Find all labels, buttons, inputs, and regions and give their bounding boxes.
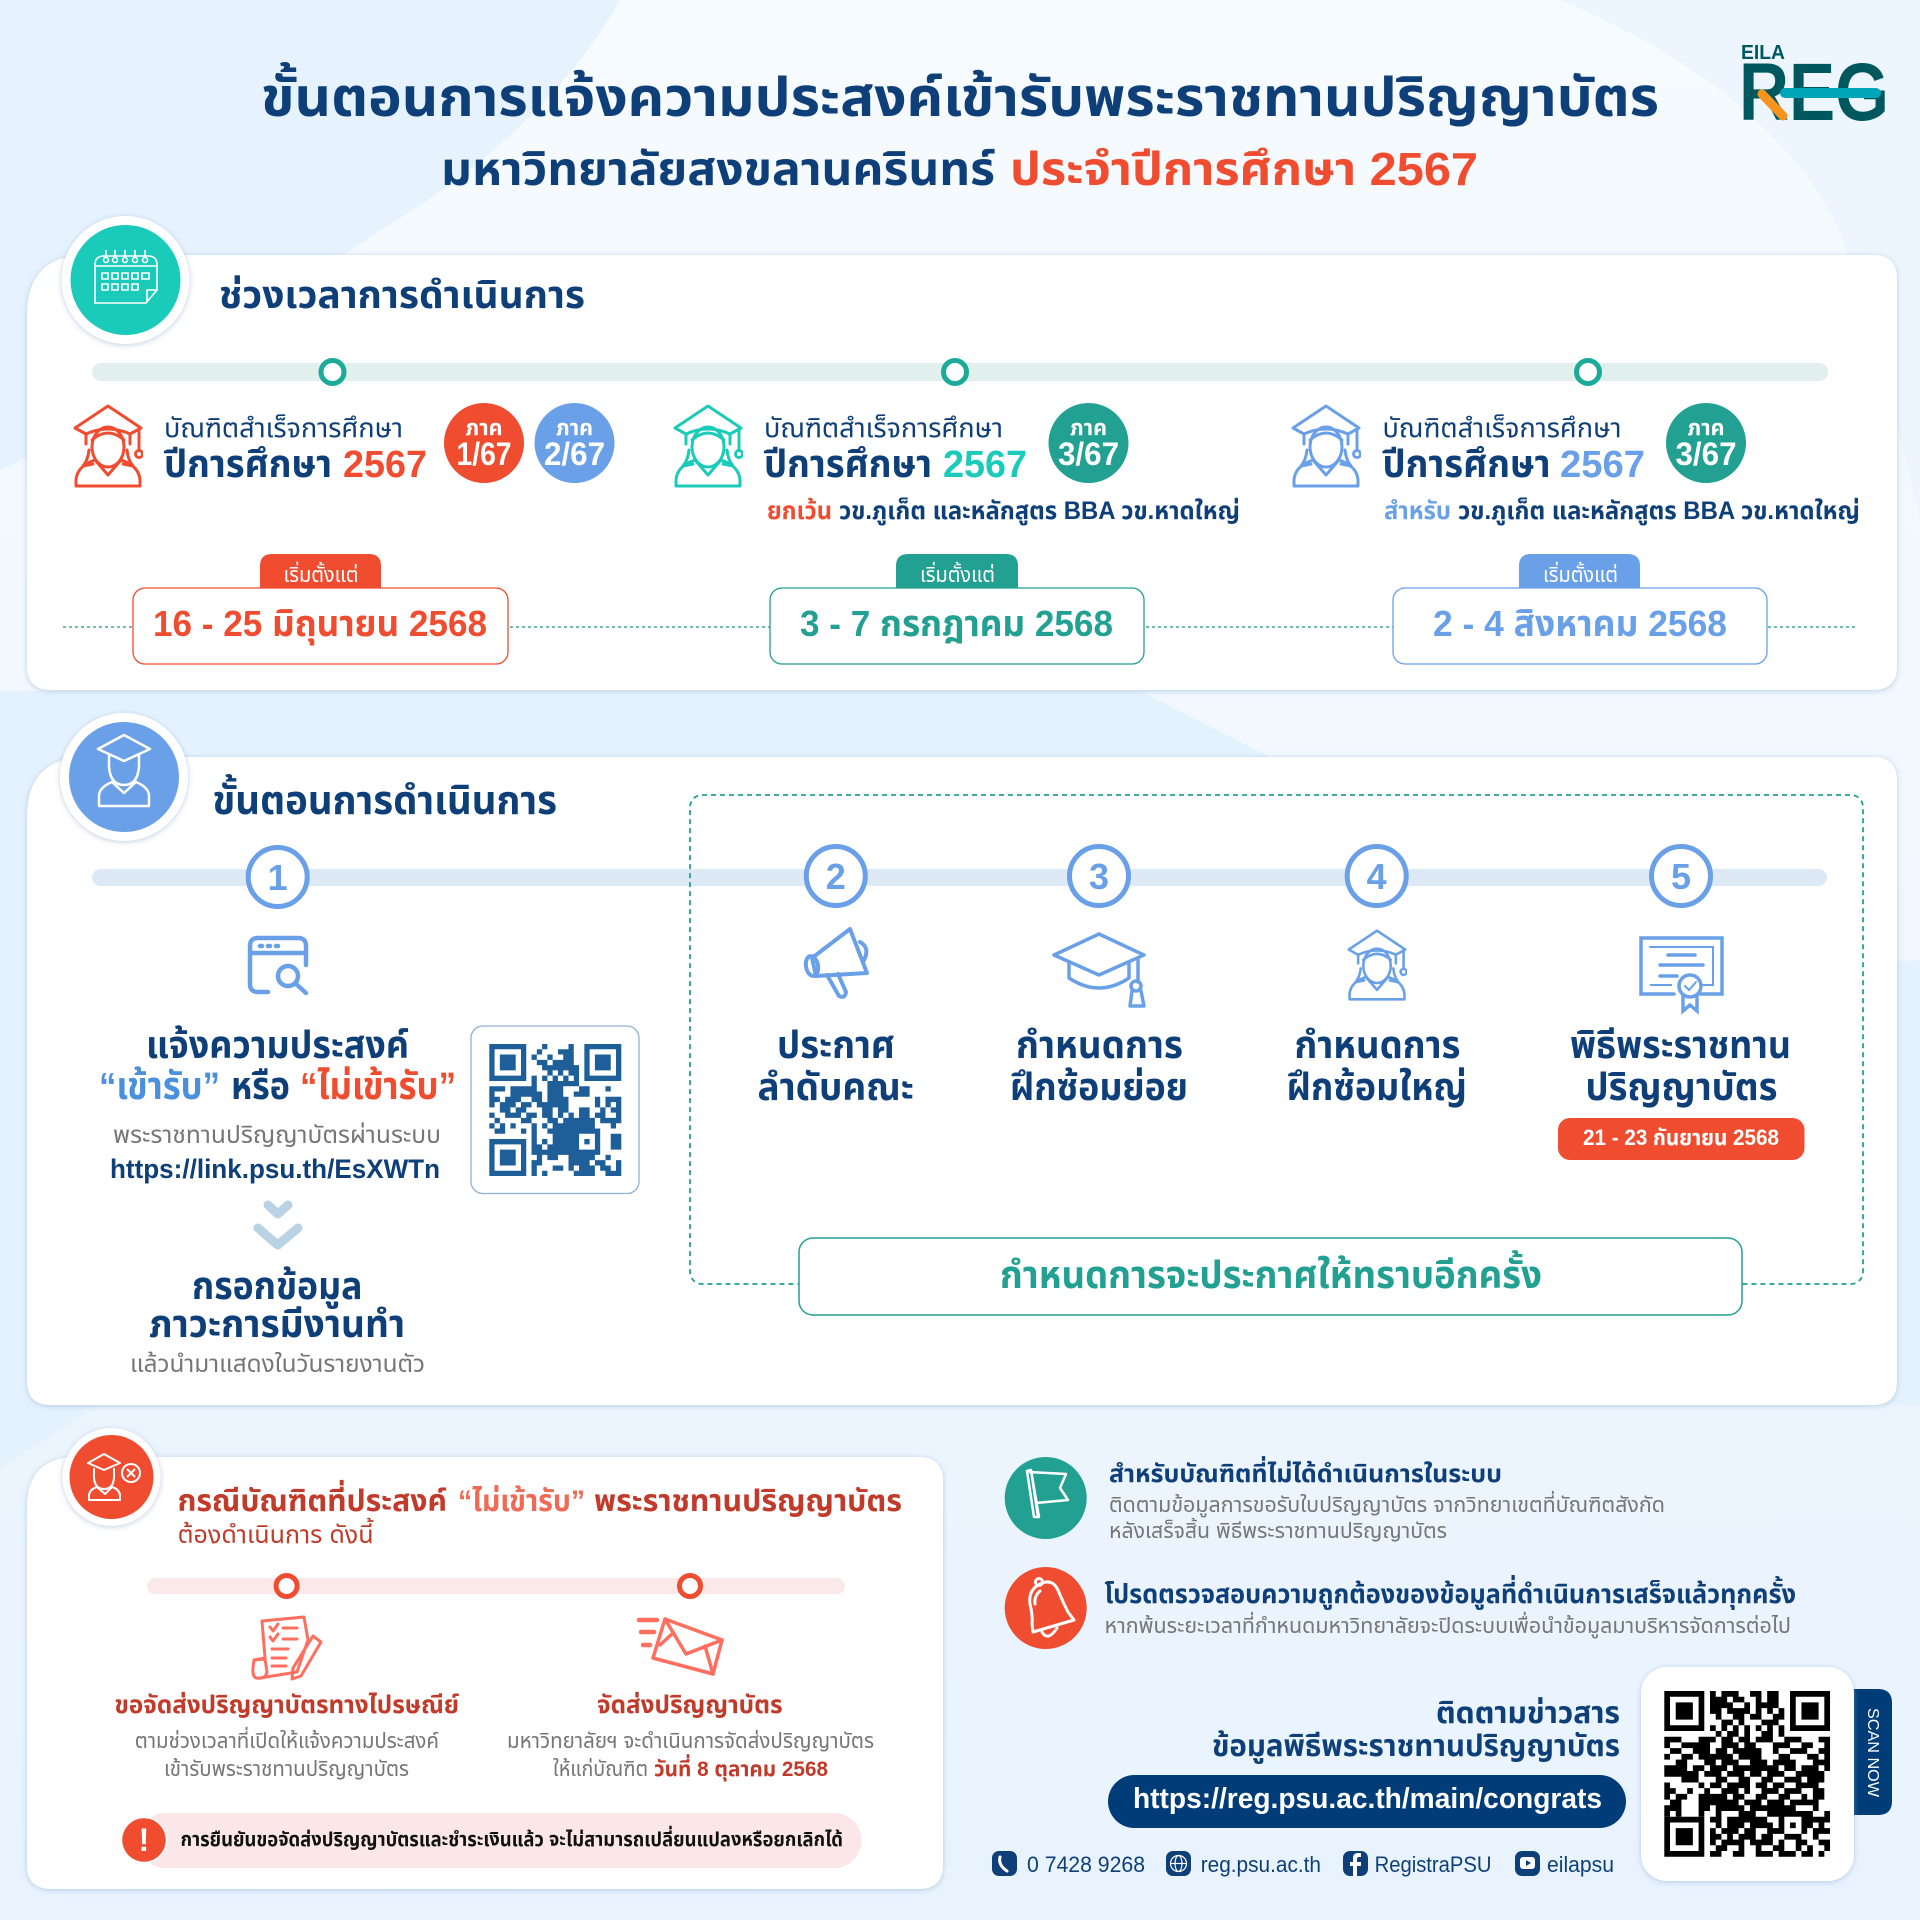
option title: ขอจัดส่งปริญญาบัตรทางไปรษณีย์ — [114, 1691, 459, 1719]
heading: ช่วงเวลาการดำเนินการ — [219, 275, 585, 317]
scan now tab: SCAN NOW — [1864, 1708, 1881, 1797]
step number 3: 3 — [1089, 856, 1109, 897]
follow news heading: ข้อมูลพิธีพระราชทานปริญญาบัตร — [1212, 1730, 1620, 1764]
follow news heading: ติดตามข่าวสาร — [1436, 1697, 1620, 1730]
ceremony date badge — [1558, 1118, 1804, 1160]
decline option: “ไม่เข้ารับ” — [300, 1066, 456, 1108]
next action note: แล้วนำมาแสดงในวันรายงานตัว — [130, 1351, 425, 1378]
contact: facebook: RegistraPSU — [1375, 1852, 1492, 1877]
badge 3/67 — [1666, 403, 1746, 483]
icon: checklist and pencil — [253, 1617, 321, 1679]
group 3: semester 3 for — [1293, 403, 1860, 526]
notice box: กำหนดการจะประกาศให้ทราบอีกครั้ง — [1000, 1249, 1542, 1297]
timeline track — [92, 360, 1828, 384]
option title: จัดส่งปริญญาบัตร — [597, 1691, 783, 1719]
step title line 2: ฝึกซ้อมใหญ่ — [1287, 1067, 1467, 1109]
or: หรือ — [231, 1066, 290, 1108]
url pill: https://reg.psu.ac.th/main/congrats — [1133, 1783, 1602, 1815]
link: https://link.psu.th/EsXWTn — [110, 1154, 440, 1184]
contact: website: reg.psu.ac.th — [1201, 1852, 1321, 1877]
step title line 2: ลำดับคณะ — [758, 1067, 914, 1109]
icon: calendar — [62, 216, 190, 344]
notice box — [799, 1238, 1742, 1315]
for note: สำหรับ — [1384, 497, 1451, 525]
step title line 1: พิธีพระราชทาน — [1570, 1025, 1791, 1067]
icon: graduate in blue circle — [60, 713, 188, 841]
step 2 — [758, 846, 914, 1109]
step number 1 — [248, 848, 307, 906]
step title line 2: ฝึกซ้อมย่อย — [1010, 1067, 1188, 1109]
panel: process steps — [27, 713, 1897, 1405]
step 4 — [1287, 846, 1467, 1109]
group 2: semester 3 except — [675, 403, 1240, 526]
badge 3/67: 3/67 — [1676, 436, 1736, 472]
year number: 2567 — [943, 444, 1027, 486]
academic year: ปีการศึกษา — [163, 444, 332, 486]
step title line 1: ประกาศ — [777, 1025, 895, 1067]
icon: graduate blue — [1293, 406, 1360, 486]
note: graduates not in system — [1005, 1456, 1665, 1543]
track — [147, 1576, 845, 1596]
ceremony date badge: 21 - 23 กันยายน 2568 — [1583, 1125, 1779, 1150]
step number 5: 5 — [1671, 856, 1691, 897]
note: verify data — [1005, 1567, 1796, 1649]
step 3 — [1010, 846, 1188, 1109]
group label: บัณฑิตสำเร็จการศึกษา — [164, 413, 403, 443]
title — [261, 62, 1659, 195]
QR code card large — [1641, 1667, 1854, 1881]
option: university delivers — [507, 1619, 874, 1782]
date box 3 — [1393, 554, 1767, 664]
delivery date: วันที่ 8 ตุลาคม 2568 — [654, 1754, 828, 1782]
badge 1/67: 1/67 — [456, 436, 512, 472]
option description line 2: ให้แก่บัณฑิต — [553, 1757, 648, 1781]
step number 1: 1 — [268, 857, 288, 898]
follow news heading — [1212, 1697, 1620, 1764]
badge 3/67 — [1048, 403, 1128, 483]
step title line 1: กำหนดการ — [1294, 1025, 1460, 1067]
url pill — [1108, 1775, 1626, 1828]
option: request postal delivery — [114, 1617, 459, 1781]
year number: 2567 — [343, 444, 427, 486]
campus note: วข.ภูเก็ต และหลักสูตร BBA วข.หาดใหญ่ — [1458, 497, 1860, 526]
badge 3/67: ภาค — [1688, 415, 1724, 440]
dashed frame — [690, 795, 1863, 1284]
heading: ขั้นตอนการดำเนินการ — [212, 773, 557, 823]
icon: certificate — [1641, 938, 1722, 1011]
group label: บัณฑิตสำเร็จการศึกษา — [764, 413, 1003, 443]
year number: 2567 — [1560, 444, 1645, 486]
note title: สำหรับบัณฑิตที่ไม่ได้ดำเนินการในระบบ — [1109, 1456, 1502, 1488]
logo — [1739, 42, 1889, 138]
contact: phone: 0 7428 9268 — [1027, 1852, 1145, 1877]
warning pill — [122, 1813, 862, 1868]
contact: youtube — [1515, 1851, 1614, 1877]
panel title: กรณีบัณฑิตที่ประสงค์ — [178, 1479, 447, 1518]
scan now tab — [1850, 1689, 1892, 1815]
date box 1: 16 - 25 มิถุนายน 2568 — [153, 603, 487, 645]
academic year: ปีการศึกษา — [763, 444, 932, 486]
icon: graduation cap — [1054, 934, 1144, 1006]
date box 2 — [770, 554, 1144, 664]
process track — [92, 869, 1827, 886]
date box 1 — [133, 554, 508, 664]
step number 4: 4 — [1367, 856, 1387, 897]
logo main wordmark: REG — [1739, 47, 1889, 138]
title line 1: ขั้นตอนการแจ้งความประสงค์เข้ารับพระราชทานปริญญาบัตร — [261, 62, 1659, 128]
note line 2: หลังเสร็จสิ้น พิธีพระราชทานปริญญาบัตร — [1109, 1517, 1447, 1543]
step 1 — [99, 848, 639, 1378]
contact row — [992, 1851, 1614, 1877]
panel: declining the ceremony — [27, 1428, 943, 1889]
warning pill: ! — [139, 1822, 149, 1858]
badge 3/67: 3/67 — [1058, 436, 1119, 472]
description: พระราชทานปริญญาบัตรผ่านระบบ — [113, 1121, 441, 1149]
icon: envelope — [639, 1619, 722, 1674]
icon: flag — [1005, 1457, 1087, 1539]
panel subtitle: ต้องดำเนินการ ดังนี้ — [178, 1517, 374, 1549]
badge 2/67: ภาค — [556, 415, 593, 440]
title line 2 academic year: ประจำปีการศึกษา 2567 — [1010, 143, 1478, 195]
step title line 2: ปริญญาบัตร — [1586, 1067, 1778, 1109]
date box 3: เริ่มตั้งแต่ — [1543, 561, 1618, 587]
note description: หากพ้นระยะเวลาที่กำหนดมหาวิทยาลัยจะปิดระบบเพื่อนำข้อมูลมาบริหารจัดการต่อไป — [1104, 1611, 1791, 1639]
note title: โปรดตรวจสอบความถูกต้องของข้อมูลที่ดำเนินการเสร็จแล้วทุกครั้ง — [1104, 1575, 1796, 1610]
step number 2: 2 — [826, 856, 846, 897]
academic year: ปีการศึกษา — [1382, 444, 1550, 486]
title line 2 university: มหาวิทยาลัยสงขลานครินทร์ — [441, 143, 996, 195]
badge 1/67 — [444, 403, 524, 483]
arrow: double chevron — [258, 1205, 298, 1245]
date box 2: 3 - 7 กรกฎาคม 2568 — [800, 603, 1113, 644]
icon: graduate — [1349, 931, 1407, 999]
step number 4 — [1347, 846, 1406, 906]
warning pill: การยืนยันขอจัดส่งปริญญาบัตรและชำระเงินแล้ว จะไม่สามารถเปลี่ยนแปลงหรือยกเลิกได้ — [181, 1825, 843, 1851]
step title line 1: กำหนดการ — [1016, 1025, 1183, 1067]
badge 3/67: ภาค — [1070, 415, 1107, 440]
dashed connector — [63, 626, 1857, 628]
campus note: วข.ภูเก็ต และหลักสูตร BBA วข.หาดใหญ่ — [839, 497, 1240, 526]
icon: graduate red — [75, 406, 142, 486]
except note: ยกเว้น — [767, 497, 832, 525]
option description line 1: มหาวิทยาลัยฯ จะดำเนินการจัดส่งปริญญาบัตร — [507, 1729, 874, 1753]
panel title end: พระราชทานปริญญาบัตร — [594, 1485, 902, 1518]
step title: แจ้งความประสงค์ — [146, 1025, 409, 1067]
note line 1: ติดตามข้อมูลการขอรับใบปริญญาบัตร จากวิทยาเขตที่บัณฑิตสังกัด — [1109, 1490, 1665, 1518]
panel: timeline periods — [27, 216, 1897, 690]
step number 2 — [806, 846, 865, 906]
step 5 — [1558, 846, 1804, 1160]
step number 5 — [1652, 846, 1710, 906]
group 1: semester 1 and 2 — [75, 403, 614, 486]
icon: graduate with cross — [62, 1428, 160, 1526]
option description line 2: เข้ารับพระราชทานปริญญาบัตร — [164, 1757, 409, 1781]
logo small wordmark: EILA — [1741, 42, 1785, 64]
icon: bell — [1005, 1567, 1087, 1649]
badge 2/67 — [534, 403, 614, 483]
panel title emphasis: “ไม่เข้ารับ” — [458, 1485, 585, 1518]
step number 3 — [1070, 846, 1128, 906]
group label: บัณฑิตสำเร็จการศึกษา — [1382, 413, 1622, 443]
QR code card — [471, 1026, 639, 1194]
option description line 1: ตามช่วงเวลาที่เปิดให้แจ้งความประสงค์ — [135, 1726, 439, 1753]
icon: browser search — [250, 938, 306, 993]
badge 1/67: ภาค — [466, 415, 502, 440]
date box 2: เริ่มตั้งแต่ — [920, 561, 995, 587]
badge 2/67: 2/67 — [544, 436, 605, 472]
date box 3: 2 - 4 สิงหาคม 2568 — [1433, 603, 1727, 644]
date box 1: เริ่มตั้งแต่ — [284, 561, 358, 587]
icon: graduate teal — [675, 406, 742, 486]
icon: megaphone — [804, 929, 867, 997]
next action title: กรอกข้อมูล — [192, 1266, 362, 1309]
accept option: “เข้ารับ” — [99, 1066, 220, 1108]
next action title line 2: ภาวะการมีงานทำ — [149, 1304, 405, 1346]
contact: youtube: eilapsu — [1547, 1852, 1614, 1877]
